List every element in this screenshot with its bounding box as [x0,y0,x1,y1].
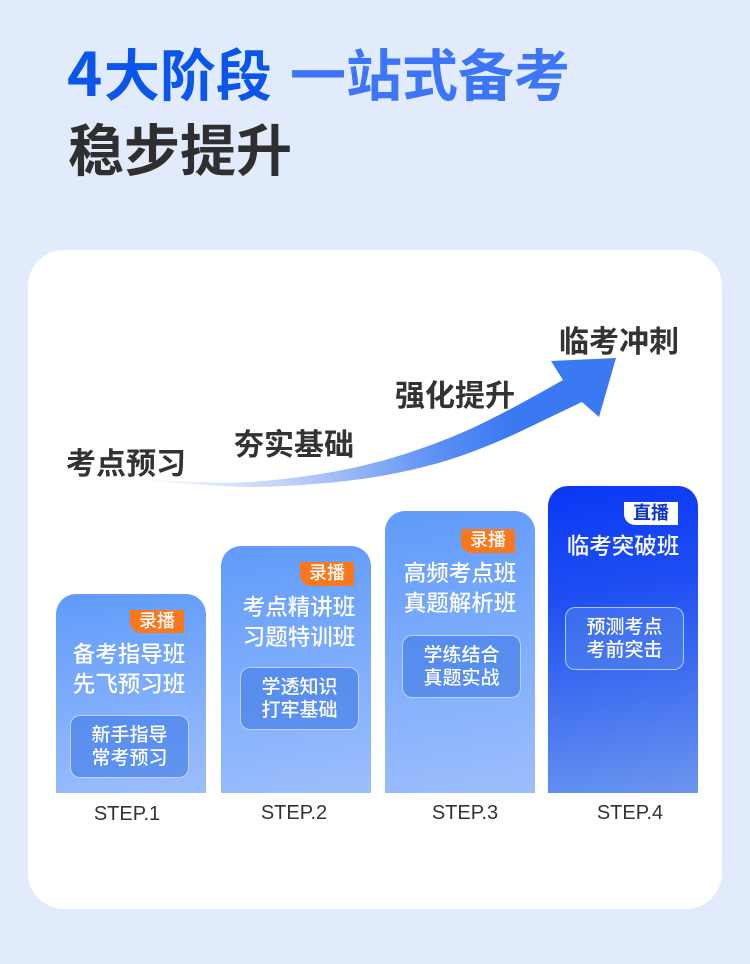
feature box: 学透知识 [261,676,338,698]
feature box [402,635,521,698]
badge: live: 直播 [633,503,669,523]
course names: 先飞预习班 [73,672,185,697]
course names: 备考指导班 [73,642,185,667]
title line 1: blue part: 4大阶段 [67,27,272,114]
step label 2: STEP.2 [261,802,327,824]
label: stage 1: 考点预习 [66,448,186,481]
panel: step 2 card [221,546,371,793]
feature box: 预测考点 [586,616,662,638]
feature box [240,667,359,730]
panel: step 1 card [56,594,206,793]
badge: recorded [130,610,184,633]
label: stage 3: 强化提升 [395,380,515,413]
badge: recorded: 录播 [309,563,345,583]
feature box: 学练结合 [423,644,500,666]
course names [404,561,516,616]
step label 1: STEP.1 [94,803,160,825]
feature box: 打牢基础 [261,700,338,720]
course names [73,642,185,697]
title line 1: light blue part: 一站式备考 [290,32,570,113]
panel: step 4 card [548,486,698,793]
course names: 习题特训班 [243,625,355,650]
label: stage 2: 夯实基础 [234,429,354,462]
label: stage 4: 临考冲刺 [559,326,679,359]
badge: recorded [300,562,354,586]
feature box [565,607,684,670]
course names: 真题解析班 [404,591,516,616]
badge: live [624,502,678,525]
course name: 临考突破班 [567,534,679,559]
feature box: 真题实战 [423,668,500,688]
badge: recorded: 录播 [470,530,506,550]
badge: recorded: 录播 [139,611,175,631]
panel: white card [28,250,722,909]
step label 3: STEP.3 [432,802,498,824]
feature box: 新手指导 [91,724,168,746]
badge: recorded [461,529,515,553]
feature box [70,715,189,778]
title line 2: 稳步提升 [68,107,292,188]
course names: 考点精讲班 [243,595,355,620]
course names [243,595,355,650]
feature box: 常考预习 [91,748,168,768]
feature box: 考前突击 [586,640,662,660]
step label 4: STEP.4 [597,802,663,824]
course names: 高频考点班 [404,561,516,586]
panel: step 3 card [385,511,535,793]
